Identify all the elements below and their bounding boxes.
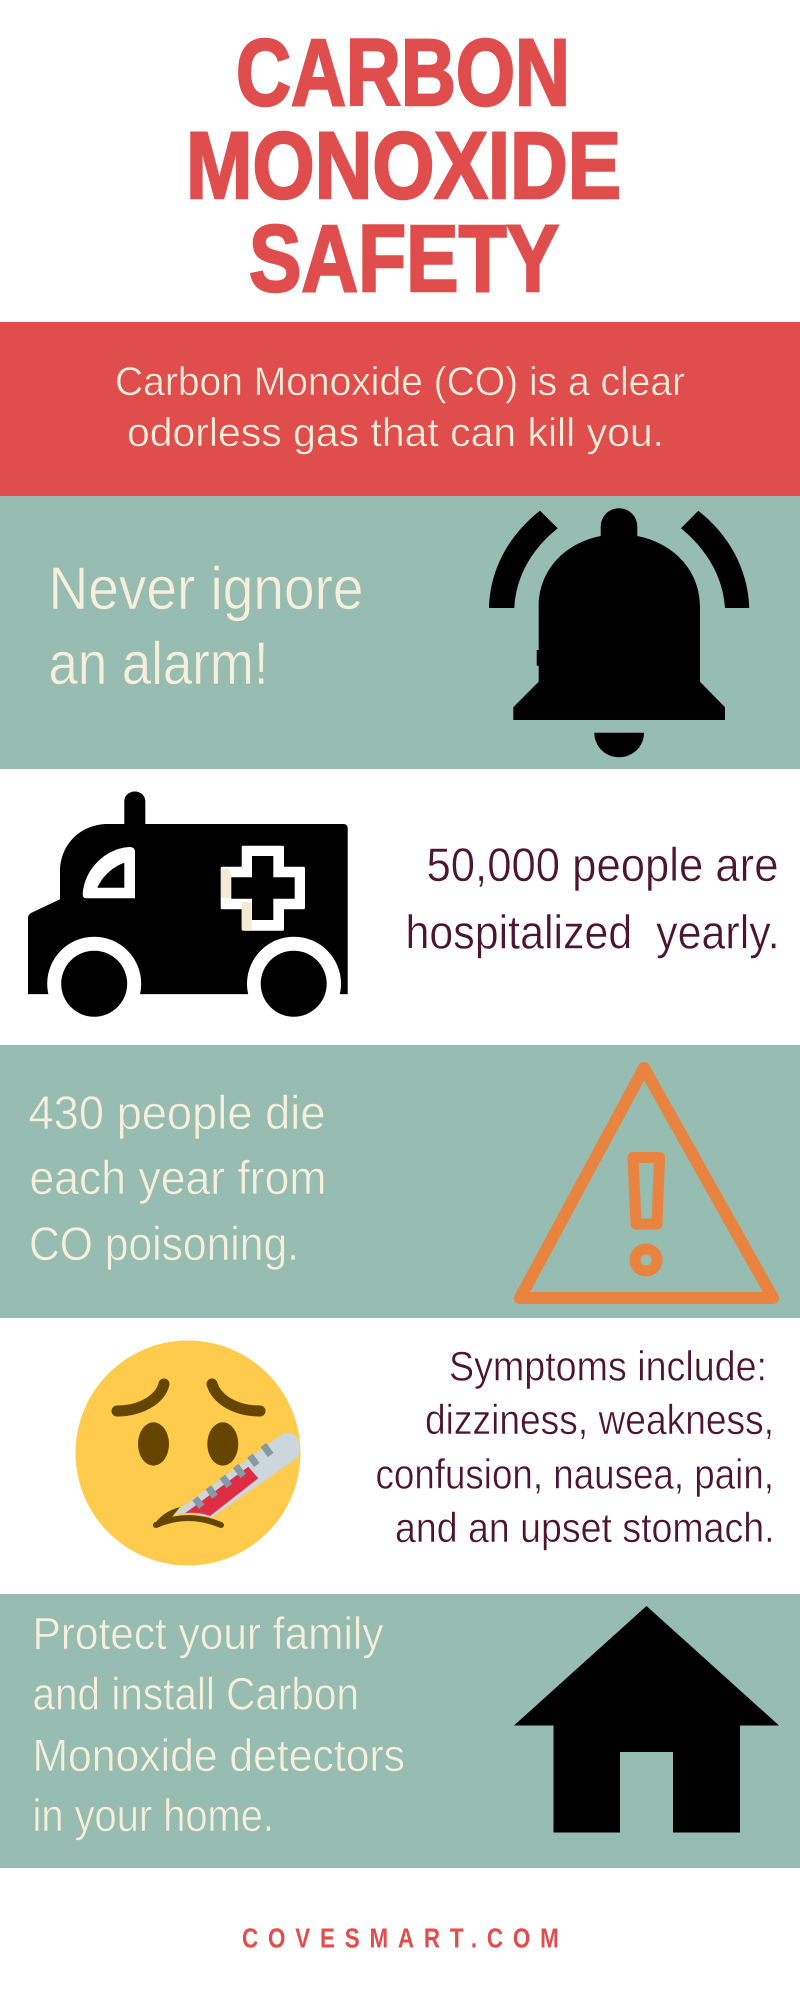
panel: protect bbox=[0, 1594, 800, 1868]
icon: sick emoji bbox=[76, 1340, 300, 1566]
definition text: odorless gas that can kill you. bbox=[127, 411, 664, 455]
panel: definition bbox=[0, 322, 800, 496]
icon: ambulance bbox=[0, 792, 360, 1031]
definition text: Carbon Monoxide (CO) is a clear bbox=[115, 360, 685, 404]
panel: deaths bbox=[0, 1045, 800, 1318]
protect text: in your home. bbox=[32, 1790, 274, 1841]
icon: bell bbox=[489, 508, 749, 757]
deaths text: CO poisoning. bbox=[29, 1217, 299, 1270]
alarm text bbox=[48, 555, 364, 697]
title: MONOXIDE bbox=[186, 113, 621, 219]
protect text: Protect your family bbox=[32, 1608, 384, 1659]
title: CARBON bbox=[236, 20, 570, 126]
title: SAFETY bbox=[249, 206, 559, 312]
protect text: and install Carbon bbox=[32, 1668, 359, 1720]
panel: alarm bbox=[0, 496, 800, 769]
panel: hospitalized bbox=[0, 792, 780, 1031]
symptoms text bbox=[376, 1342, 774, 1551]
hospitalized text: 50,000 people are bbox=[426, 838, 778, 891]
symptoms text: Symptoms include: bbox=[449, 1342, 767, 1390]
protect text bbox=[32, 1608, 405, 1841]
deaths text: 430 people die bbox=[28, 1086, 326, 1139]
deaths text: each year from bbox=[30, 1151, 326, 1204]
icon: warning triangle bbox=[520, 1068, 773, 1298]
panel: symptoms bbox=[76, 1340, 774, 1566]
protect text: Monoxide detectors bbox=[32, 1730, 405, 1781]
footer: COVESMART.COM bbox=[242, 1923, 559, 1954]
deaths text bbox=[28, 1086, 326, 1270]
icon: house bbox=[514, 1606, 779, 1832]
alarm text: an alarm! bbox=[48, 630, 268, 697]
title bbox=[186, 20, 621, 312]
hospitalized text bbox=[406, 838, 780, 958]
alarm text: Never ignore bbox=[48, 555, 364, 622]
definition text bbox=[115, 360, 685, 455]
